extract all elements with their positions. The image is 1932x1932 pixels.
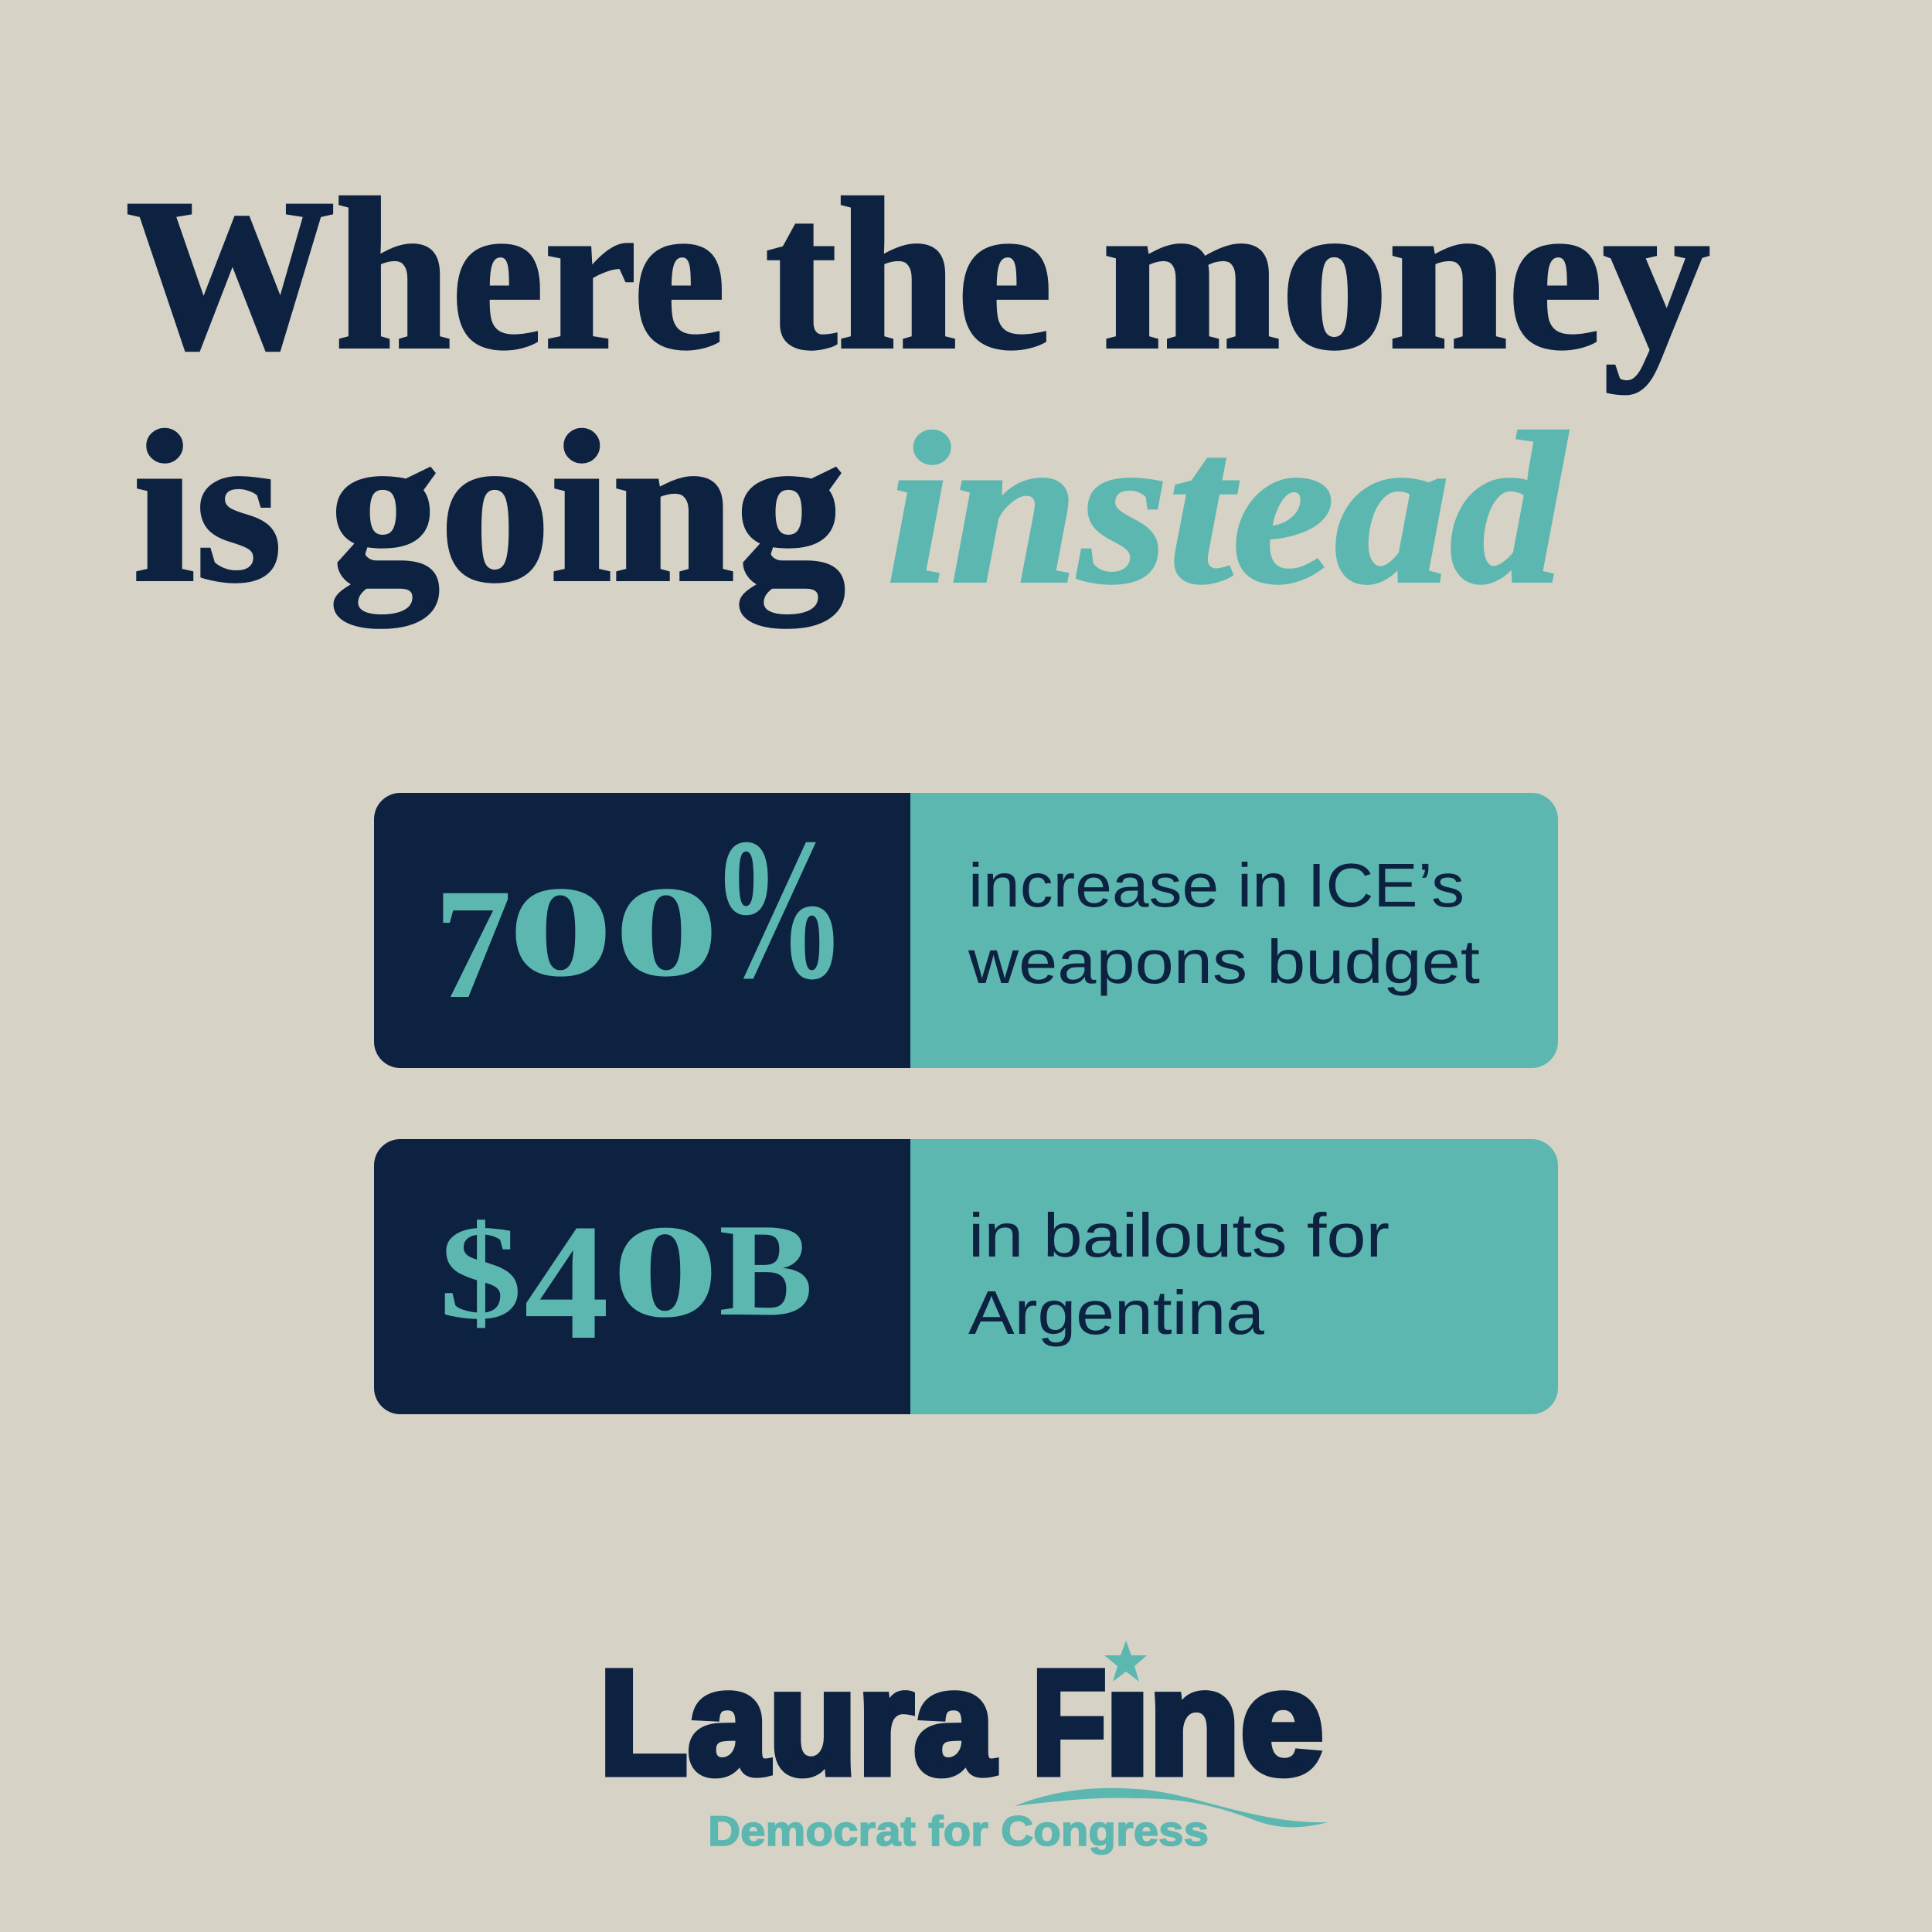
stat: $40B: $: [439, 1197, 522, 1347]
icon: wave: [1015, 1788, 1328, 1827]
description: ICE weapons budget: increase in ICE’s: [968, 851, 1464, 920]
panel: 700% stat: [374, 793, 1558, 1068]
description: Argentina bailouts: in bailouts for: [968, 1201, 1389, 1270]
panel: $40B stat: [374, 1139, 1558, 1414]
tagline: Democrat for Congress: [708, 1807, 1209, 1855]
title: Where: [126, 154, 726, 394]
logo name: Laura: [599, 1639, 995, 1805]
title: going: [329, 386, 845, 631]
title: instead: [886, 388, 1569, 628]
stat: $40B: B: [719, 1197, 813, 1344]
logo name: F: [1032, 1639, 1107, 1805]
description: Argentina bailouts: [968, 1201, 1389, 1347]
logo name: i: [1104, 1639, 1151, 1805]
stat: 700%: 7: [434, 856, 512, 1032]
title: money: [1102, 154, 1710, 394]
stat: 700%: 00: [508, 860, 719, 1004]
stat: 700%: [434, 797, 846, 1032]
description: Argentina bailouts: Argentina: [968, 1278, 1265, 1347]
description: ICE weapons budget: [968, 851, 1480, 996]
stat: 700%: %: [711, 797, 846, 1021]
title: [126, 154, 1710, 631]
stat: $40B: 0: [611, 1199, 719, 1345]
stat: $40B: 4: [524, 1189, 609, 1374]
description: ICE weapons budget: weapons budget: [968, 927, 1480, 996]
logo name: [599, 1639, 1324, 1805]
logo: Laura Fine: [599, 1639, 1328, 1855]
title: the: [765, 154, 1053, 394]
icon: star: [1104, 1641, 1147, 1682]
title: is: [133, 386, 282, 627]
stat: $40B: [439, 1189, 813, 1374]
logo name: ne: [1148, 1639, 1324, 1805]
